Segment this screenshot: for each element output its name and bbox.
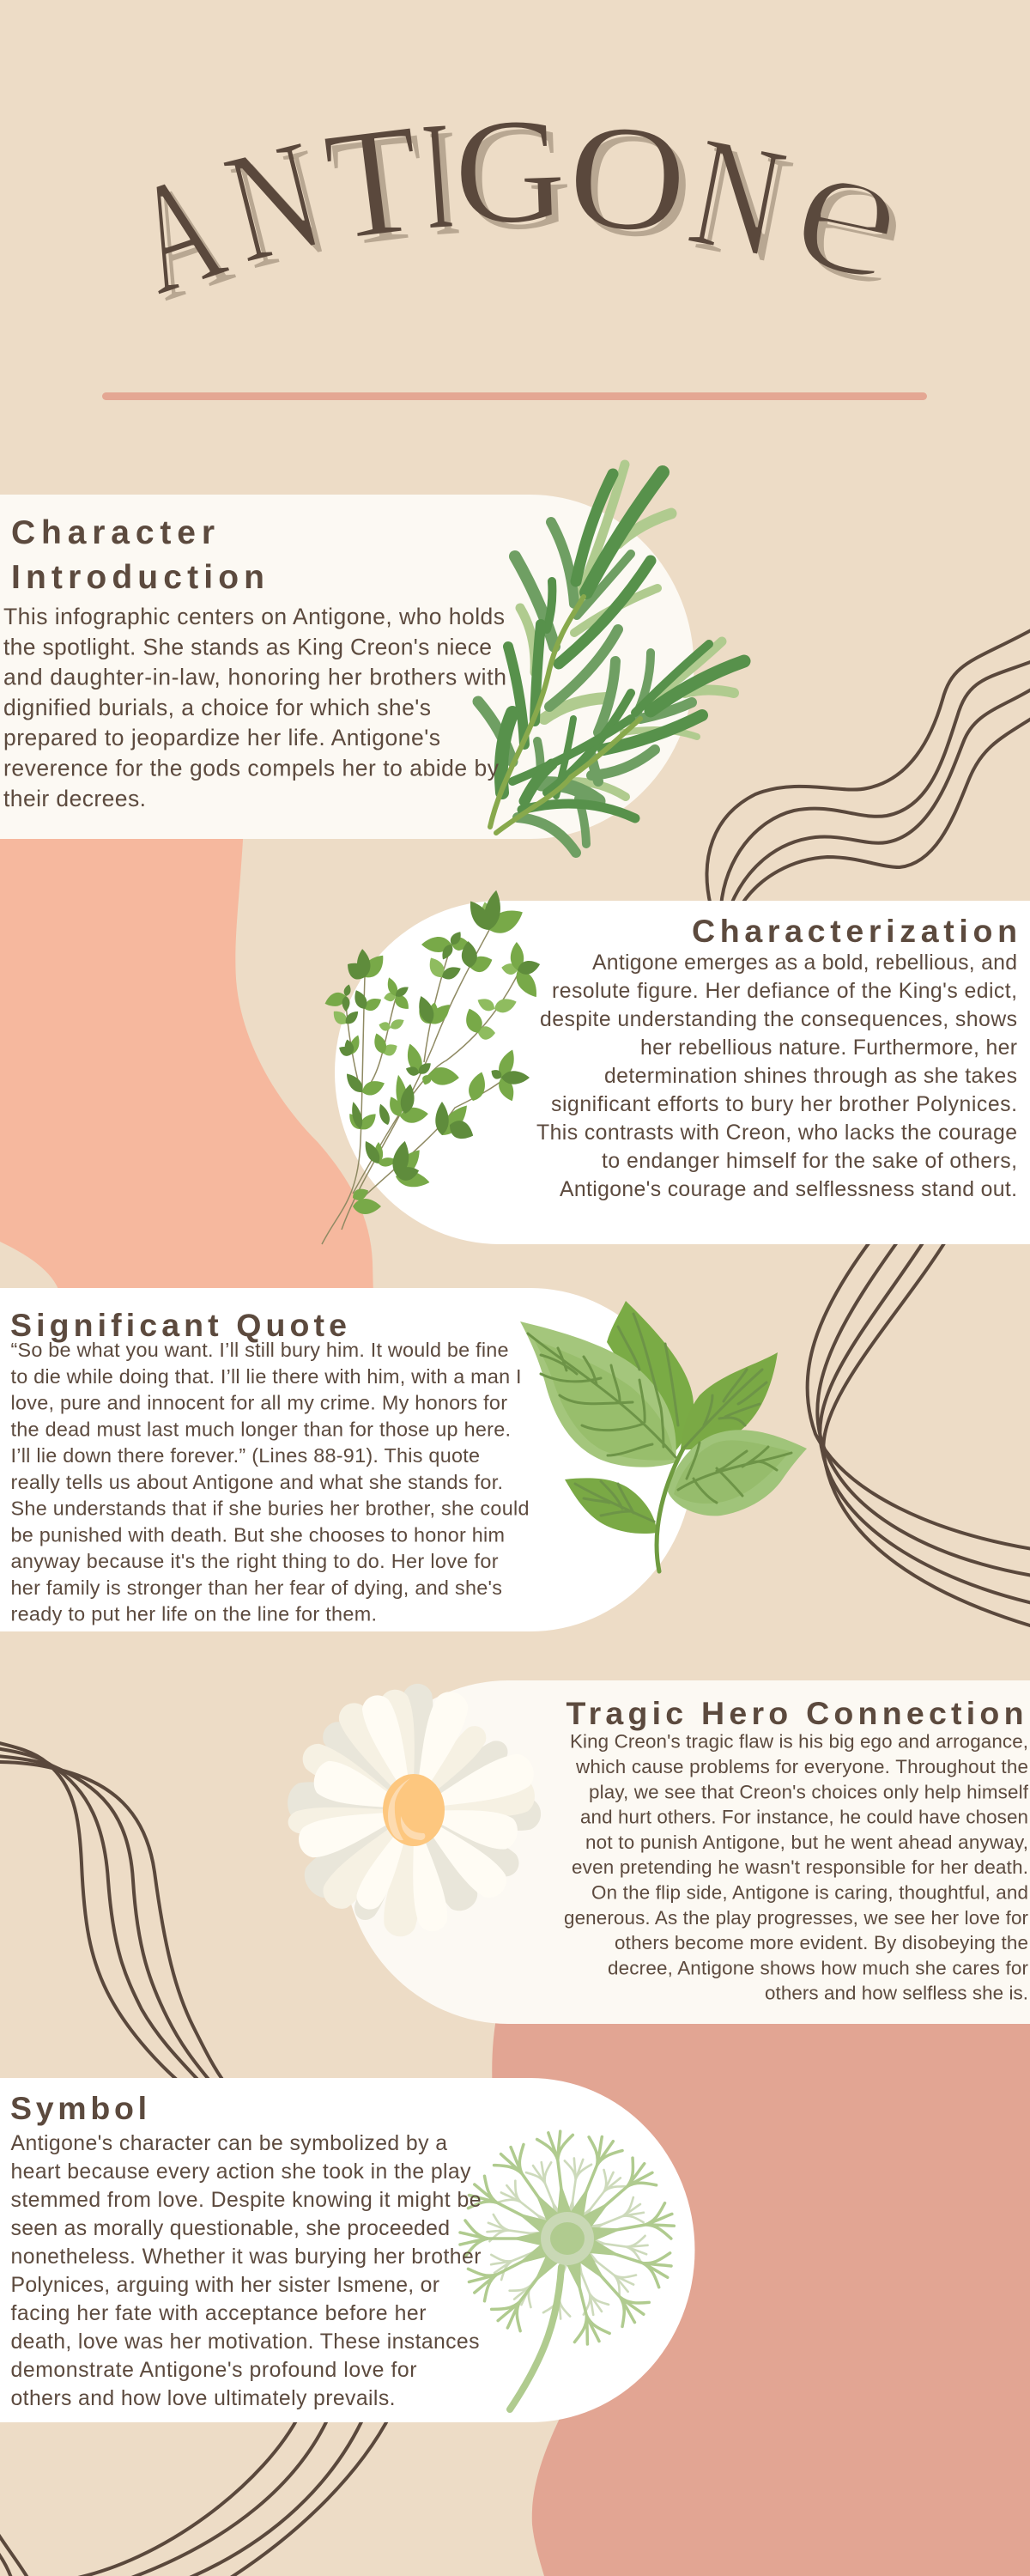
body text: She understands that if she buries her brother, she could bbox=[10, 1498, 529, 1520]
body text: generous. As the play progresses, we see her love for bbox=[564, 1907, 1029, 1929]
body text bbox=[536, 951, 1017, 1201]
body text: heart because every action she took in the play bbox=[10, 2160, 471, 2184]
title: Antigone: N bbox=[210, 107, 337, 296]
body text: ready to put her life on the line for them. bbox=[10, 1602, 377, 1625]
body text: play, we see that Creon's choices only help himself bbox=[589, 1781, 1029, 1802]
title: Antigone: G bbox=[451, 87, 568, 257]
body text: King Creon's tragic flaw is his big ego and arrogance, bbox=[570, 1731, 1028, 1753]
body text: This infographic centers on Antigone, who holds bbox=[3, 604, 505, 629]
title: Antigone bbox=[113, 87, 924, 327]
body text bbox=[10, 1339, 529, 1625]
body text: stemmed from love. Despite knowing it might be bbox=[10, 2189, 481, 2212]
body text: the dead must last much longer than for those up here. bbox=[10, 1418, 511, 1440]
panel: character introduction bbox=[0, 465, 744, 853]
body text: reverence for the gods compels her to abide by bbox=[3, 756, 500, 781]
icon: green leaves bbox=[520, 1301, 807, 1571]
icon: thyme sprig bbox=[322, 889, 542, 1244]
peach background blob bbox=[0, 824, 373, 1297]
body text: Antigone emerges as a bold, rebellious, and bbox=[592, 951, 1017, 975]
panel background bbox=[343, 1680, 1030, 2024]
title: Antigone: T bbox=[317, 91, 430, 273]
panel: significant quote bbox=[0, 1288, 807, 1631]
body text: I’ll lie down there forever.” (Lines 88-91). This quote bbox=[10, 1444, 480, 1467]
icon: daisy flower bbox=[286, 1683, 542, 1938]
body text: resolute figure. Her defiance of the King's edict, bbox=[552, 980, 1017, 1003]
heading: Tragic Hero Connection bbox=[566, 1695, 1023, 1731]
body text: not to punish Antigone, but he went ahead anyway, bbox=[585, 1832, 1028, 1853]
heading bbox=[11, 514, 264, 596]
body text: really tells us about Antigone and what she stands for. bbox=[10, 1471, 503, 1493]
body text: prepared to jeopardize her life. Antigone's bbox=[3, 725, 440, 750]
body text: the spotlight. She stands as King Creon's niece bbox=[3, 634, 492, 659]
heading: Introduction bbox=[11, 559, 264, 596]
body text: determination shines through as she takes bbox=[604, 1065, 1017, 1088]
body text: others become more evident. By disobeying the bbox=[615, 1932, 1028, 1953]
body text: Polynices, arguing with her sister Ismene, or bbox=[10, 2274, 439, 2297]
salmon background blob bbox=[492, 2009, 1030, 2576]
title: Antigone: e bbox=[774, 93, 924, 324]
panel: symbol bbox=[0, 2078, 694, 2422]
body text: anyway because it's the right thing to do. Her love for bbox=[10, 1550, 499, 1572]
title: Antigone: A bbox=[113, 138, 242, 327]
heading: Characterization bbox=[692, 913, 1017, 949]
body text: significant efforts to bury her brother Polynices. bbox=[551, 1093, 1017, 1116]
body text: Antigone's character can be symbolized by a bbox=[10, 2132, 447, 2155]
panel: characterization bbox=[322, 889, 1030, 1244]
body text bbox=[10, 2132, 481, 2410]
body text: facing her fate with acceptance before her bbox=[10, 2302, 426, 2325]
icon: rosemary sprig bbox=[478, 465, 744, 853]
body text: nonetheless. Whether it was burying her brother bbox=[10, 2245, 481, 2269]
body text: others and how selfless she is. bbox=[765, 1983, 1028, 2004]
body text: her family is stronger than her fear of dying, and she's bbox=[10, 1577, 502, 1599]
body text: which cause problems for everyone. Throughout the bbox=[575, 1756, 1028, 1777]
heading: Character bbox=[11, 514, 215, 551]
body text: Antigone's courage and selflessness stand out. bbox=[560, 1178, 1017, 1201]
body text: despite understanding the consequences, shows bbox=[540, 1008, 1017, 1031]
body text: be punished with death. But she chooses to honor him bbox=[10, 1523, 505, 1546]
wavy lines: middle left bbox=[0, 1742, 227, 2087]
panel background bbox=[0, 495, 694, 839]
body text: “So be what you want. I’ll still bury him. It would be fine bbox=[10, 1339, 508, 1361]
body text: seen as morally questionable, she proceeded bbox=[10, 2217, 450, 2240]
title: Antigone: N bbox=[677, 104, 797, 291]
panel background bbox=[0, 2078, 694, 2422]
body text: and hurt others. For instance, he could have chosen bbox=[580, 1807, 1028, 1828]
body text: to endanger himself for the sake of others, bbox=[602, 1150, 1017, 1173]
body text: their decrees. bbox=[3, 786, 146, 811]
body text: others and how love ultimately prevails. bbox=[10, 2387, 395, 2410]
heading: Symbol bbox=[10, 2090, 147, 2126]
heading: Significant Quote bbox=[10, 1307, 347, 1343]
body text: love, pure and innocent for all my crime. My honors for bbox=[10, 1391, 507, 1413]
wavy lines: top right bbox=[707, 629, 1030, 906]
title: Antigone: I bbox=[417, 89, 458, 262]
body text: On the flip side, Antigone is caring, thoughtful, and bbox=[591, 1882, 1028, 1903]
icon: dandelion bbox=[460, 2129, 676, 2409]
body text: dignified burials, a choice for which she's bbox=[3, 695, 431, 720]
panel: tragic hero connection bbox=[286, 1680, 1030, 2024]
title underline rule bbox=[102, 392, 927, 400]
body text: death, love was her motivation. These instances bbox=[10, 2330, 479, 2354]
wavy lines: middle right bbox=[808, 1236, 1030, 1626]
panel background bbox=[0, 1288, 694, 1631]
body text: demonstrate Antigone's profound love for bbox=[10, 2359, 417, 2382]
body text: her rebellious nature. Furthermore, her bbox=[640, 1036, 1017, 1060]
body text: decree, Antigone shows how much she cares for bbox=[608, 1957, 1029, 1978]
body text bbox=[3, 604, 506, 811]
body text: even pretending he wasn't responsible for her death. bbox=[572, 1856, 1028, 1878]
body text: and daughter-in-law, honoring her brothers with bbox=[3, 665, 506, 690]
body text bbox=[564, 1731, 1029, 2004]
wavy lines: bottom left bbox=[0, 2413, 391, 2576]
body text: to die while doing that. I’ll lie there with him, with a man I bbox=[10, 1365, 522, 1388]
body text: This contrasts with Creon, who lacks the courage bbox=[536, 1121, 1017, 1145]
title: Antigone: O bbox=[564, 92, 691, 264]
panel background bbox=[335, 901, 1030, 1244]
